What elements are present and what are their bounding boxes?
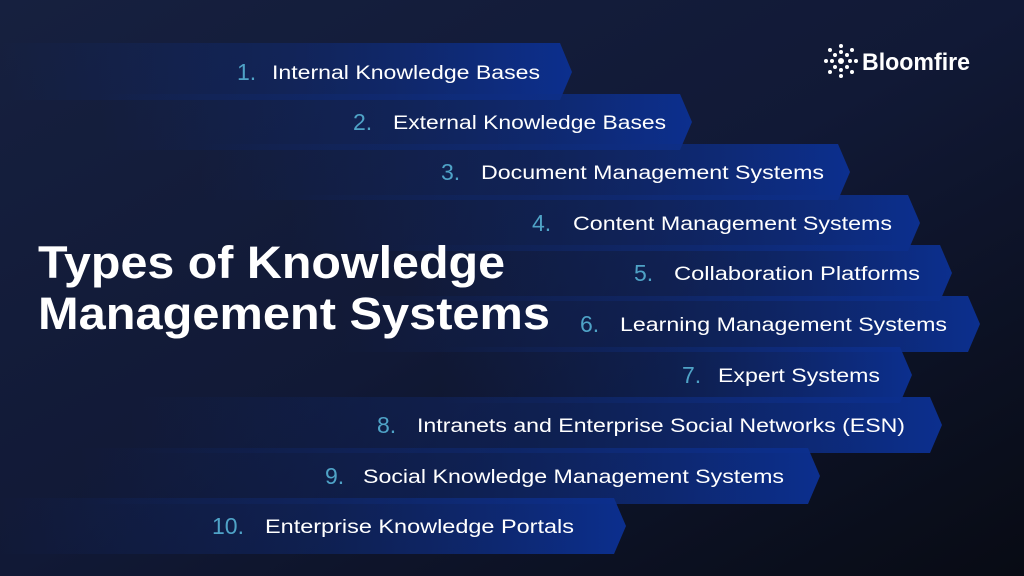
- item 6: 6.: [580, 311, 599, 337]
- title: [38, 237, 550, 339]
- band 10: [0, 498, 626, 554]
- band 8: [130, 397, 942, 453]
- title: Management Systems: [38, 288, 550, 339]
- item 9: 9.: [325, 463, 344, 489]
- list items: [212, 59, 947, 539]
- logo text: Bloomfire: [862, 49, 970, 76]
- band 3: [200, 144, 850, 200]
- item 4: 4.: [532, 210, 551, 236]
- item 10: Enterprise Knowledge Portals: [265, 517, 574, 538]
- item 8: Intranets and Enterprise Social Networks (ESN): [417, 416, 905, 437]
- item 7: [682, 362, 880, 388]
- logo: [824, 44, 970, 78]
- band 6: [340, 296, 980, 352]
- item 3: Document Management Systems: [481, 163, 824, 184]
- item 6: Learning Management Systems: [620, 315, 947, 336]
- item 4: [532, 210, 892, 236]
- item 9: [325, 463, 784, 489]
- band 2: [100, 94, 692, 150]
- item 3: 3.: [441, 159, 460, 185]
- item 4: Content Management Systems: [573, 214, 892, 235]
- item 7: 7.: [682, 362, 701, 388]
- title: Types of Knowledge: [38, 237, 505, 288]
- band 4: [290, 195, 920, 251]
- band 7: [440, 347, 912, 403]
- item 10: [212, 513, 574, 539]
- item 8: [377, 412, 905, 438]
- item 9: Social Knowledge Management Systems: [363, 467, 784, 488]
- item 7: Expert Systems: [718, 366, 880, 387]
- band 9: [80, 448, 820, 504]
- item 10: 10.: [212, 513, 244, 539]
- item 1: [237, 59, 540, 85]
- item 2: 2.: [353, 109, 372, 135]
- item 2: [353, 109, 666, 135]
- band 5: [400, 245, 952, 301]
- band 1: [0, 43, 572, 100]
- item 5: 5.: [634, 260, 653, 286]
- item 5: [634, 260, 920, 286]
- item 6: [580, 311, 947, 337]
- item 1: 1.: [237, 59, 256, 85]
- item 8: 8.: [377, 412, 396, 438]
- item 1: Internal Knowledge Bases: [272, 63, 540, 84]
- item 5: Collaboration Platforms: [674, 264, 920, 285]
- icon: bloom: [824, 44, 858, 78]
- item 3: [441, 159, 824, 185]
- item 2: External Knowledge Bases: [393, 113, 666, 134]
